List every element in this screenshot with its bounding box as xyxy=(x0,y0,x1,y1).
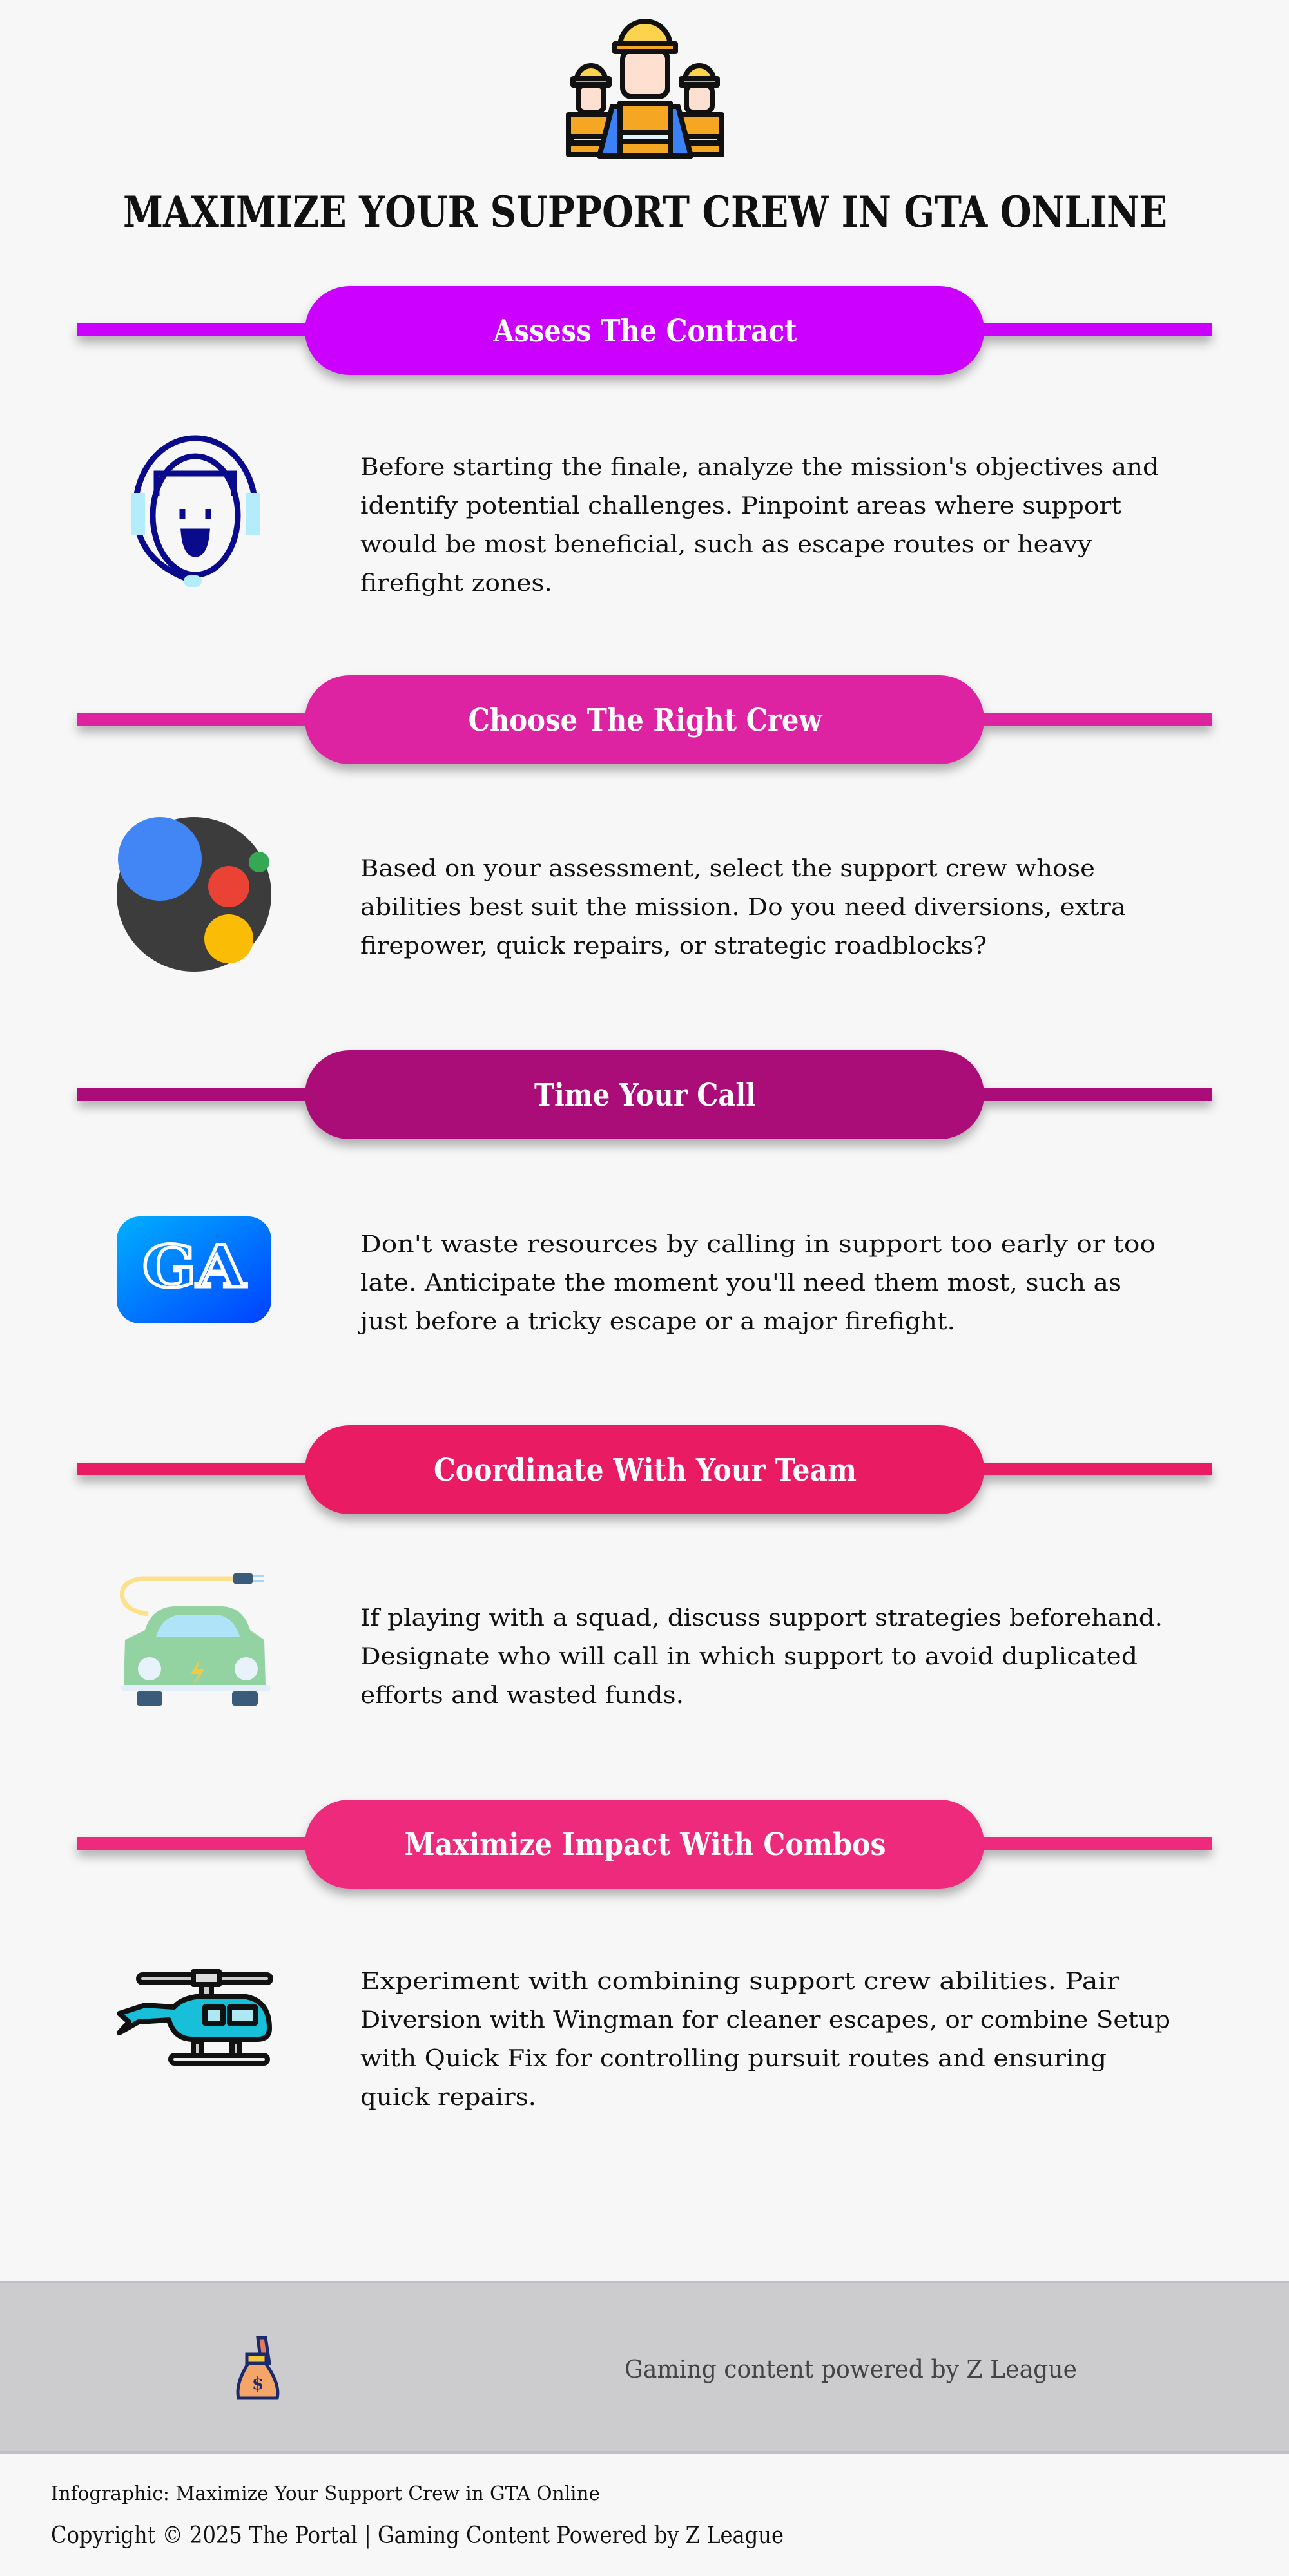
icon: GA app: GA xyxy=(142,1233,246,1301)
section header: Assess The Contract xyxy=(77,286,1212,375)
credits xyxy=(51,2483,784,2549)
icon: money bag xyxy=(238,2338,278,2398)
icon: helicopter xyxy=(119,1972,271,2063)
text: time: Don't waste resources by calling in support too early or too xyxy=(360,1231,1156,1258)
text: choose: abilities best suit the mission. Do you need diversions, extra xyxy=(360,894,1126,921)
text: combos xyxy=(360,1968,1170,2111)
text: assess: identify potential challenges. Pinpoint areas where support xyxy=(360,493,1122,519)
text: combos: Diversion with Wingman for cleaner escapes, or combine Setup xyxy=(360,2007,1170,2033)
text: coordinate: If playing with a squad, discuss support strategies beforehand. xyxy=(360,1605,1163,1631)
icon: construction crew xyxy=(568,21,722,156)
section header: Time Your Call xyxy=(77,1050,1212,1139)
text: assess: would be most beneficial, such as escape routes or heavy xyxy=(360,532,1092,558)
section header: Maximize Impact With Combos: Maximize Impact With Combos xyxy=(405,1827,886,1863)
footer band xyxy=(0,2281,1289,2454)
section header: Coordinate With Your Team: Coordinate With Your Team xyxy=(434,1452,857,1488)
text: combos: Experiment with combining support crew abilities. Pair xyxy=(360,1968,1120,1995)
icon: assistant dots xyxy=(117,817,271,972)
text: coordinate: Designate who will call in which support to avoid duplicated xyxy=(360,1644,1138,1670)
text: assess xyxy=(360,454,1159,597)
icon: headset agent xyxy=(131,438,260,587)
section header: Assess The Contract: Assess The Contract xyxy=(493,313,797,349)
text: time: just before a tricky escape or a major firefight. xyxy=(358,1309,955,1335)
text: time xyxy=(358,1231,1156,1335)
text: coordinate: efforts and wasted funds. xyxy=(360,1682,684,1709)
text: choose: firepower, quick repairs, or strategic roadblocks? xyxy=(360,933,987,959)
text: assess: Before starting the finale, analyze the mission's objectives and xyxy=(360,454,1159,481)
text: combos: with Quick Fix for controlling pursuit routes and ensuring xyxy=(360,2046,1107,2072)
credits: Copyright © 2025 The Portal | Gaming Content Powered by Z League xyxy=(51,2523,784,2549)
icon: money bag: $ xyxy=(252,2374,264,2394)
icon: electric car xyxy=(121,1573,271,1706)
text: time: late. Anticipate the moment you'll need them most, such as xyxy=(360,1270,1121,1296)
text: coordinate xyxy=(360,1605,1163,1709)
text: assess: firefight zones. xyxy=(360,570,552,597)
text: choose: Based on your assessment, select the support crew whose xyxy=(360,856,1095,882)
section header: Choose The Right Crew: Choose The Right Crew xyxy=(468,702,823,738)
section header: Time Your Call: Time Your Call xyxy=(534,1077,756,1113)
text: choose xyxy=(360,856,1126,959)
section header: Maximize Impact With Combos xyxy=(77,1800,1212,1889)
credits: Infographic: Maximize Your Support Crew in GTA Online xyxy=(51,2483,600,2505)
text: combos: quick repairs. xyxy=(360,2084,536,2111)
section header: Coordinate With Your Team xyxy=(77,1425,1212,1514)
footer text: Gaming content powered by Z League xyxy=(625,2355,1077,2383)
icon: GA app xyxy=(117,1216,271,1323)
section header: Choose The Right Crew xyxy=(77,675,1212,764)
